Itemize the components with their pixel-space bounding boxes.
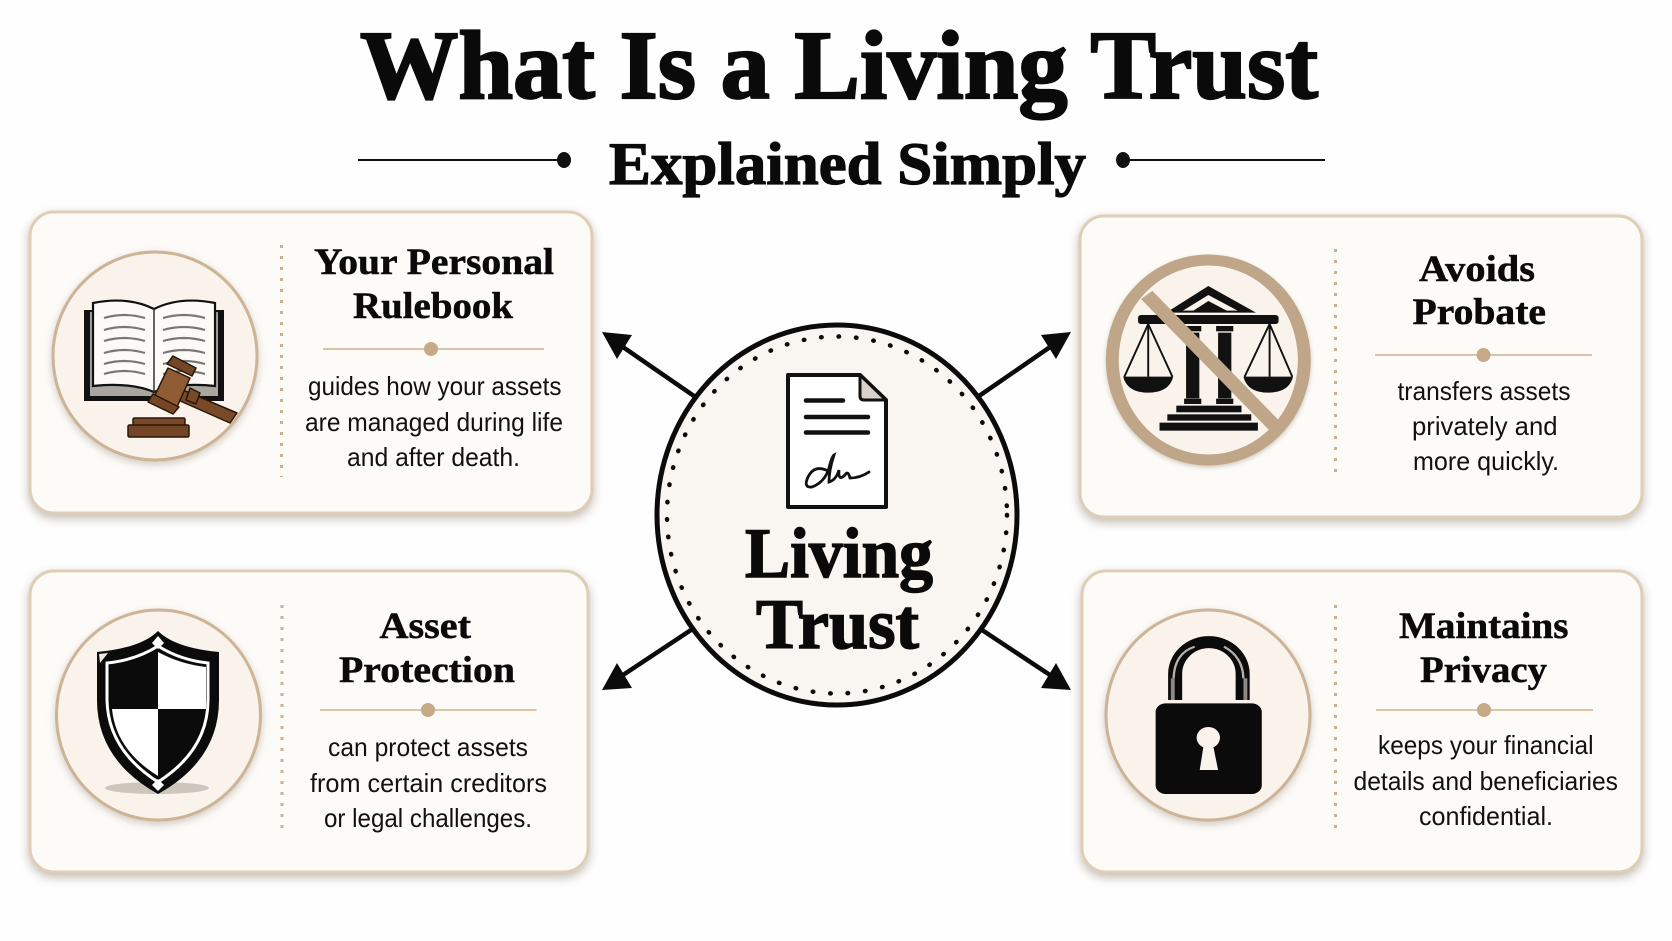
icon: book and gavel: [53, 252, 257, 460]
text: probate description: more quickly.: [1413, 446, 1559, 476]
text: privacy description: details and beneficiaries: [1354, 766, 1618, 796]
icon: prohibited courthouse and scales: [1112, 260, 1304, 460]
heading: your personal rulebook: [314, 242, 554, 327]
icon: shield: [56, 610, 260, 820]
heading: maintains privacy: Maintains: [1399, 606, 1568, 647]
heading: asset protection: [339, 606, 515, 691]
panel: asset protection: [30, 571, 588, 872]
icon: padlock: [1106, 610, 1310, 820]
text: probate description: transfers assets: [1398, 376, 1570, 406]
heading: your personal rulebook: Your Personal: [314, 242, 554, 283]
text: probate description: [1398, 376, 1570, 476]
arrow: to bottom right: [979, 628, 1071, 690]
central circle: living trust: [657, 325, 1017, 705]
heading: asset protection: Protection: [339, 650, 515, 691]
panel: maintains privacy: [1082, 571, 1642, 872]
heading: avoids probate: Avoids: [1419, 249, 1535, 290]
icon: signed document: [788, 375, 886, 507]
text: privacy description: keeps your financial: [1378, 730, 1594, 760]
arrow: to bottom left: [602, 628, 694, 690]
label: living trust: Trust: [756, 586, 919, 664]
title: What Is a Living Trust: [360, 12, 1318, 119]
heading: asset protection: Asset: [380, 606, 472, 647]
text: privacy description: [1354, 730, 1618, 831]
text: rulebook description: guides how your assets: [308, 371, 562, 401]
text: rulebook description: [305, 371, 563, 472]
text: rulebook description: and after death.: [347, 442, 520, 472]
subtitle with flanking rules: Explained Simply: [609, 131, 1086, 197]
panel: your personal rulebook: [30, 212, 592, 513]
text: privacy description: confidential.: [1419, 801, 1553, 831]
arrow: to top left: [602, 332, 694, 396]
panel: avoids probate: [1080, 216, 1642, 517]
text: protection description: [310, 732, 547, 833]
heading: avoids probate: [1412, 249, 1546, 333]
label: living trust: Living: [745, 515, 933, 593]
text: rulebook description: are managed during life: [305, 407, 563, 437]
label: living trust: [745, 515, 933, 664]
subtitle with flanking rules: [358, 131, 1325, 197]
heading: maintains privacy: [1399, 606, 1568, 691]
text: protection description: can protect assets: [328, 732, 528, 762]
heading: avoids probate: Probate: [1412, 292, 1546, 333]
text: probate description: privately and: [1412, 411, 1558, 441]
heading: maintains privacy: Privacy: [1420, 650, 1548, 691]
text: protection description: or legal challenges.: [324, 803, 532, 833]
text: protection description: from certain creditors: [310, 768, 547, 798]
arrow: to top right: [979, 332, 1071, 396]
heading: your personal rulebook: Rulebook: [353, 286, 513, 327]
